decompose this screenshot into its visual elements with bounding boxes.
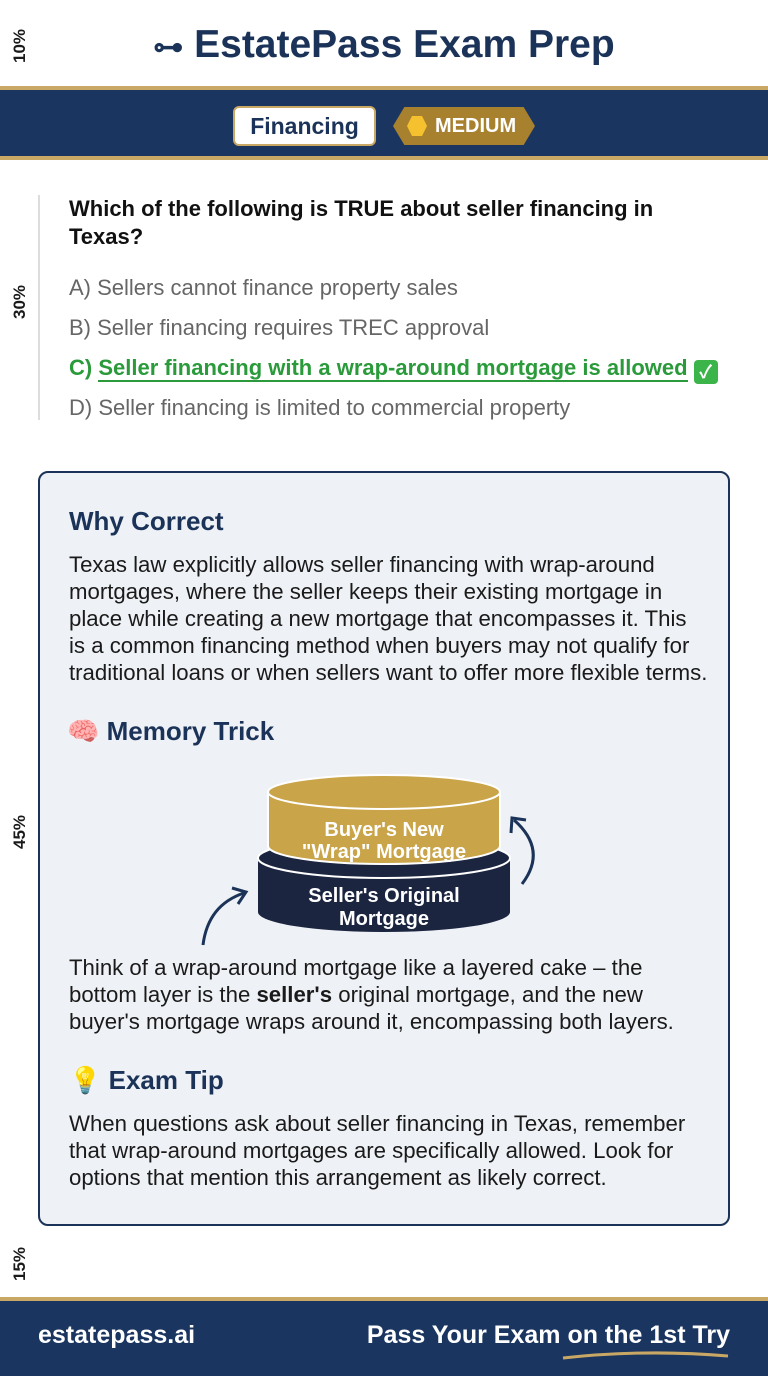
question text: [69, 196, 653, 249]
option C correct: C) Seller financing with a wrap-around mortgage is allowed: [69, 355, 688, 380]
text: memory trick: Think of a wrap-around mortgage like a layered cake – the: [69, 955, 642, 980]
arrow left: [203, 893, 244, 945]
footer left: estatepass.ai: [38, 1321, 195, 1349]
text: memory trick: bottom layer is the seller's original mortgage, and the new: [69, 982, 643, 1007]
side label 15%: 15%: [10, 1247, 29, 1281]
bottom layer: Mortgage: [339, 908, 429, 930]
arrow right: [514, 820, 533, 884]
text: exam tip: When questions ask about seller financing in Texas, remember: [69, 1111, 685, 1136]
bottom layer: [258, 838, 510, 932]
text: exam tip: that wrap-around mortgages are specifically allowed. Look for: [69, 1138, 673, 1163]
footer: [0, 1297, 768, 1376]
top layer: Buyer's New: [324, 819, 444, 841]
badge: MEDIUM: MEDIUM: [435, 115, 516, 137]
top layer: [268, 775, 500, 864]
top layer: "Wrap" Mortgage: [302, 841, 466, 863]
option A: A) Sellers cannot finance property sales: [69, 275, 458, 300]
question text: Texas?: [69, 224, 143, 249]
text: why correct: place while creating a new mortgage that encompasses it. This: [69, 606, 686, 631]
heading: Why Correct: Why Correct: [69, 506, 224, 536]
title: ⊶ EstatePass Exam Prep: [153, 23, 615, 66]
chart: layered cake: [202, 774, 535, 946]
heading: Memory Trick: 🧠 Memory Trick: [67, 716, 274, 746]
bottom layer: Seller's Original: [308, 885, 460, 907]
side label 45%: 45%: [10, 815, 29, 849]
header band: [0, 86, 768, 160]
text: exam tip: [69, 1111, 685, 1190]
side label 10%: 10%: [10, 29, 29, 63]
side label 30%: 30%: [10, 285, 29, 319]
panel: explanation: [38, 471, 730, 1226]
question text: Which of the following is TRUE about seller financing in: [69, 196, 653, 221]
text: memory trick: [69, 955, 674, 1034]
text: why correct: traditional loans or when sellers want to offer more flexible terms.: [69, 660, 707, 685]
footer right tagline: Pass Your Exam on the 1st Try: [367, 1321, 730, 1349]
heading: Exam Tip: 💡 Exam Tip: [69, 1065, 224, 1095]
option C correct: ✓: [699, 362, 712, 382]
option B: B) Seller financing requires TREC approval: [69, 315, 489, 340]
text: why correct: Texas law explicitly allows seller financing with wrap-around: [69, 552, 655, 577]
option D: D) Seller financing is limited to commercial property: [69, 395, 570, 420]
text: why correct: is a common financing method when buyers may not qualify for: [69, 633, 689, 658]
text: memory trick: buyer's mortgage wraps around it, encompassing both layers.: [69, 1009, 674, 1034]
text: exam tip: options that mention this arrangement as likely correct.: [69, 1165, 607, 1190]
underline swoosh: [562, 1351, 728, 1360]
badge: MEDIUM: [393, 107, 535, 145]
badge: Financing: [233, 106, 376, 146]
text: why correct: [69, 552, 707, 685]
question block: [38, 195, 738, 420]
badge: Financing: Financing: [250, 113, 359, 139]
text: why correct: mortgages, where the seller keeps their existing mortgage in: [69, 579, 662, 604]
